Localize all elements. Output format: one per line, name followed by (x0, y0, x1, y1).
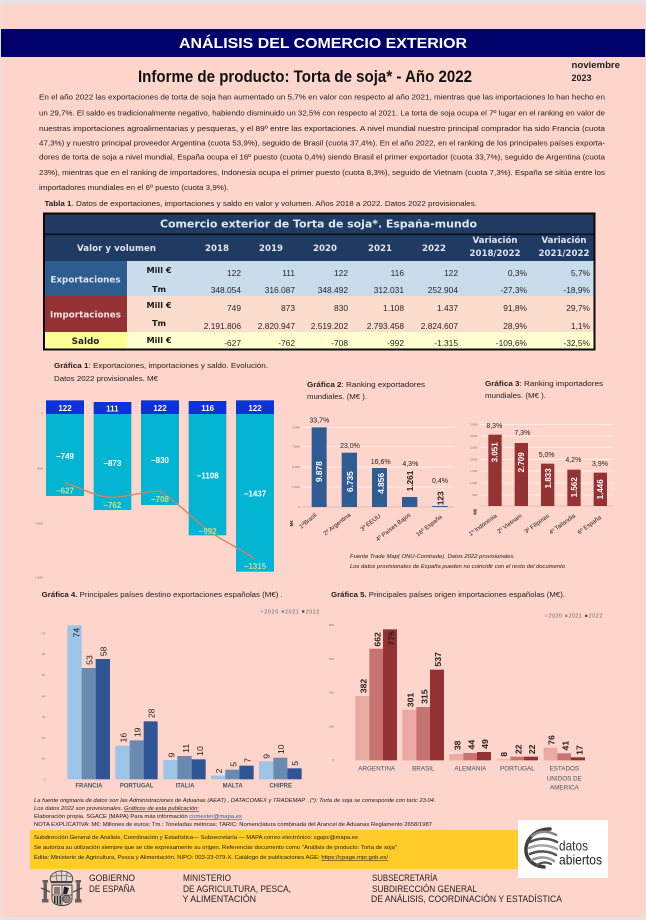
axis labels: -500 (37, 467, 43, 471)
axis labels: -1,500 (34, 576, 43, 580)
share labels: 4,3% (402, 461, 418, 468)
share labels: 23,0% (340, 443, 360, 450)
value labels (490, 442, 605, 499)
exportaciones values: 5,7% (571, 268, 591, 278)
category labels: UNIDOS DE (547, 775, 582, 782)
table header row: 2018/2022 (470, 249, 521, 259)
value labels: 17 (574, 745, 584, 755)
value labels: 22 (527, 744, 537, 754)
axis labels (470, 422, 478, 497)
table header row: 2021 (368, 244, 392, 254)
chart: grafica 1 evolucion (34, 400, 274, 580)
footnotes: Los datos 2022 son provisionales. Gráficos de esta publicación: (34, 806, 200, 812)
intro text: 23%), mientras que en el ranking de importadores, Indonesia ocupa el primer puesto (cuota 8,3%), seguido de Vietnam (cuota 7,3%). España se sitúa entre los (39, 168, 605, 177)
share labels (309, 417, 448, 485)
footer: ministerio (182, 873, 291, 905)
value labels: 1.261 (405, 470, 415, 491)
table header row: 2019 (259, 244, 283, 254)
share labels: 4,2% (565, 457, 581, 464)
table caption: Tabla 1 . Datos de exportaciones, importaciones y saldo en valor y volumen. Años 2018 a 2022. Datos 2022 provisionales. (44, 199, 477, 208)
importaciones values: 2.793.458 (367, 321, 404, 331)
share labels: 8,3% (486, 423, 502, 430)
import labels (56, 452, 267, 498)
value labels: 28 (146, 708, 156, 718)
import labels: −873 (103, 459, 122, 468)
value labels: 382 (358, 679, 368, 693)
table header row: 2018 (205, 244, 229, 254)
value labels (358, 631, 584, 757)
value labels: 123 (436, 491, 446, 505)
date: 2023 (572, 73, 592, 83)
value labels: 11 (181, 744, 191, 753)
exportaciones values: -27,3% (500, 285, 528, 295)
value labels: 1.562 (570, 477, 579, 497)
saldo values: -992 (387, 338, 404, 348)
axis labels: 2,500 (470, 445, 478, 449)
row labels (50, 276, 121, 347)
value labels: 53 (84, 655, 94, 665)
title banner: ANÁLISIS DEL COMERCIO EXTERIOR (179, 35, 467, 52)
value labels: 58 (99, 646, 109, 656)
bars 2022 (383, 629, 585, 760)
legend (545, 614, 602, 620)
bars 2022 (96, 659, 302, 779)
category labels: 6º España (576, 514, 603, 536)
value labels: 4.856 (376, 473, 386, 494)
axis labels: 600 (329, 657, 334, 661)
category labels: ARGENTINA (358, 766, 396, 773)
axis labels: 3,000 (470, 434, 478, 438)
exportaciones values: 122 (334, 268, 348, 278)
value labels: 9 (167, 752, 177, 757)
axis labels: 5,000 (292, 465, 300, 469)
chart: grafica 2 ranking exportadores (289, 417, 454, 543)
importaciones values: 1,1% (571, 321, 591, 331)
axis unit: M€ (289, 520, 294, 526)
heading: grafica 1: Gráfica 1 : Exportaciones, importaciones y saldo. Evolución. (54, 361, 268, 370)
saldo labels: −1315 (244, 562, 267, 571)
share labels: 3,9% (592, 461, 608, 468)
importaciones values: 1.437 (437, 303, 458, 313)
unit labels: Tm (152, 284, 166, 294)
category labels (298, 511, 444, 543)
saldo labels: −992 (199, 527, 217, 536)
title banner (1, 29, 645, 57)
logo: datos abiertos (518, 820, 608, 878)
saldo values: -708 (331, 338, 348, 348)
date: noviembre (572, 60, 620, 70)
value labels: 1.833 (544, 468, 553, 488)
credits band (30, 830, 520, 869)
unit labels: Mill € (146, 335, 172, 345)
axis labels: 0 (41, 411, 43, 415)
icon: coat of arms (41, 870, 82, 906)
bars 2020 (67, 625, 273, 779)
axis labels: 70 (42, 631, 46, 635)
export labels: 122 (58, 404, 72, 413)
footnotes: La fuente originaria de datos son las Administraciones de Aduanas (AEAT) , DATACOMEX y TRADEMAP . (*): Torta de soja se corresponde con taric 23.04. (34, 798, 435, 804)
axis labels: 20 (42, 736, 46, 740)
saldo values: -109,6% (496, 338, 528, 348)
source note: Los datos provisionales de España pueden no coincidir con el resto del documento (350, 564, 565, 570)
importaciones values: 749 (227, 303, 241, 313)
source note: Fuente Trade Map( ONU-Comtrade). Datos 2022 provisionales. (350, 554, 515, 560)
row labels: Saldo (72, 337, 99, 347)
axis labels: 500 (472, 493, 478, 497)
category labels: ITALIA (176, 783, 195, 789)
saldo line (65, 483, 255, 559)
saldo labels: −762 (103, 501, 122, 510)
category labels: 3º EEUU (359, 513, 382, 533)
share labels: 33,7% (309, 417, 329, 424)
legend: 2020 (264, 610, 278, 616)
importaciones values (204, 303, 591, 331)
axis labels: 800 (329, 623, 334, 627)
category labels (358, 766, 582, 792)
bars 2020 (355, 696, 557, 760)
export labels: 116 (201, 404, 215, 413)
axis labels: 2,500 (292, 485, 300, 489)
crown (50, 870, 73, 883)
pillars (41, 880, 82, 902)
importaciones values: 29,7% (566, 303, 591, 313)
value labels: 74 (72, 628, 82, 637)
share labels: 7,3% (514, 430, 530, 437)
footnotes (34, 798, 435, 828)
bars (488, 435, 607, 506)
heading: grafica 1: Datos 2022 provisionales. M€ (54, 374, 158, 383)
icon: striped globe (526, 829, 557, 867)
axis labels: 1,000 (470, 481, 478, 485)
footer: gobierno (89, 873, 135, 895)
date (572, 60, 620, 83)
category labels: ESTADOS (549, 766, 579, 773)
axis labels (42, 631, 46, 781)
value labels: 1.446 (596, 479, 605, 499)
legend: 2021 (569, 614, 582, 620)
value labels: 2.709 (517, 452, 526, 472)
import bars (46, 414, 274, 572)
value labels: 16 (118, 733, 128, 742)
legend: 2022 (589, 614, 602, 620)
intro text: dores de torta de soja a nivel mundial, España ocupa el 16º puesto (cuota 0,4%) siendo Brasil el primer exportador (cuota 33,7%), seguido de Argentina (cuota (39, 152, 606, 161)
value labels: 9.878 (314, 461, 324, 482)
axis labels: 50 (42, 673, 46, 677)
axis labels: 2,000 (470, 457, 478, 461)
value labels: 662 (372, 632, 382, 647)
axis labels: 1,500 (470, 469, 478, 473)
value labels: 8 (499, 752, 509, 757)
heading: grafica 1 (54, 361, 268, 383)
intro text (39, 92, 606, 192)
value labels: 301 (406, 693, 416, 707)
category labels (76, 783, 292, 789)
row labels: Exportaciones (50, 276, 121, 286)
importaciones values: 2.820.947 (258, 321, 295, 331)
value labels (314, 461, 446, 505)
footer: ministerio: MINISTERIO (183, 873, 231, 884)
bars 2021 (82, 668, 287, 779)
value labels: 6.735 (345, 471, 355, 492)
table title: Comercio exterior de Torta de soja*. España-mundo (160, 218, 477, 230)
exportaciones values (211, 268, 591, 295)
exportaciones values: 111 (282, 268, 295, 278)
saldo labels: −627 (56, 486, 75, 495)
credits band: Subdirección General de Análisis, Coordinación y Estadística— Subsecretaría — MAPA correo electrónico: sgapc@mapa.es (34, 835, 358, 841)
axis labels: -1,000 (34, 522, 43, 526)
report title: Informe de producto: Torta de soja* - Año 2022 (138, 67, 472, 86)
heading: grafica 2: Gráfica 2 : Ranking exportadores (307, 380, 425, 389)
heading: grafica 3: Gráfica 3 : Ranking importadores (485, 379, 603, 388)
value labels: 537 (433, 652, 443, 667)
value labels: 41 (560, 741, 570, 750)
share labels: 5,0% (539, 452, 555, 459)
unit labels (146, 265, 172, 345)
axis labels: 60 (42, 652, 46, 656)
footer: subsecretaria: SUBSECRETARÍA (372, 873, 438, 884)
bars 2021 (369, 649, 571, 760)
saldo labels (56, 486, 267, 571)
table header row: Valor y volumen (77, 244, 156, 254)
table header row: Variación (472, 235, 518, 246)
export labels: 111 (106, 404, 119, 413)
exportaciones values: 312.031 (374, 285, 404, 295)
bars (312, 427, 448, 507)
exportaciones values: -18,9% (563, 285, 591, 295)
heading: grafica 5: Gráfica 5. Principales países origen importaciones españolas (M€). (331, 590, 565, 599)
category labels: 2º Argentina (322, 511, 353, 537)
heading: grafica 2 (307, 380, 425, 401)
unit labels: Tm (152, 318, 166, 328)
share labels (486, 423, 608, 468)
value labels: 10 (195, 746, 205, 756)
value labels: 9 (262, 754, 272, 759)
heading: grafica 2: mundiales. (M€ ). (307, 392, 367, 401)
import labels: −1108 (197, 471, 219, 480)
importaciones values: 2.519.202 (311, 321, 348, 331)
footer: gobierno: GOBIERNO (89, 873, 135, 884)
category labels: 1ºBrasil (298, 512, 318, 530)
table header row (77, 235, 590, 259)
import labels: −830 (151, 456, 170, 465)
saldo values: -627 (224, 338, 241, 348)
source note (350, 554, 565, 570)
exportaciones values: 348.492 (318, 285, 348, 295)
value labels: 10 (276, 744, 286, 754)
export labels: 122 (248, 404, 262, 413)
axis labels: 400 (329, 691, 334, 695)
axis labels: 40 (42, 694, 46, 698)
shield (52, 885, 72, 906)
axis labels: 7,500 (292, 445, 300, 449)
axis labels: 0 (44, 777, 46, 781)
exportaciones values: 0,3% (508, 268, 528, 278)
legend: 2020 (549, 614, 562, 620)
axis labels: 0 (298, 505, 300, 509)
category labels: CHIPRE (269, 783, 292, 789)
heading: grafica 4: Gráfica 4. Principales países destino exportaciones españolas (M€) . (42, 590, 283, 599)
importaciones values: 873 (281, 303, 295, 313)
legend: 2022 (306, 610, 319, 616)
footer: gobierno: DE ESPAÑA (89, 884, 135, 895)
row labels: Importaciones (50, 310, 121, 320)
axis labels: 3,000 (292, 425, 300, 429)
axis labels: 200 (329, 724, 334, 728)
value labels: 775 (386, 631, 396, 646)
exportaciones values: 348.054 (211, 285, 241, 295)
category labels: FRANCIA (76, 783, 103, 789)
category labels: 3º Filipinas (523, 513, 551, 535)
export bars (46, 400, 274, 414)
category labels: AMERICA (550, 785, 580, 792)
saldo labels: −708 (151, 495, 170, 504)
importaciones values: 28,9% (503, 321, 528, 331)
value labels: 5 (290, 761, 300, 766)
intro text: un 29,7%. El saldo es tradicionalmente negativo, habiendo disminuido un 32,5% con respecto al 2021. La torta de soja ocupa el 7º lugar en el ranking en valor de (39, 108, 605, 117)
category labels: ALEMANIA (454, 766, 487, 773)
value labels: 49 (480, 739, 490, 749)
value labels: 3.051 (490, 442, 499, 462)
importaciones values: 1.108 (383, 303, 404, 313)
exportaciones values: 122 (444, 268, 458, 278)
table header row: 2022 (422, 244, 446, 254)
export labels (58, 404, 262, 413)
credits band: Edita: Ministerio de Agricultura, Pesca y Alimentación. NIPO: 003-23-079-X. Catálogo de publicaciones AGE: https://cpage.mpr.gob.es/ (34, 855, 389, 861)
axis labels: 3,500 (470, 422, 478, 426)
legend (261, 610, 319, 616)
value labels: 315 (419, 689, 429, 704)
share labels: 16,6% (371, 459, 391, 466)
axis labels (292, 425, 300, 509)
unit labels: Mill € (146, 300, 172, 310)
importaciones values: 2.824.607 (421, 321, 458, 331)
exportaciones values: 316.087 (265, 285, 295, 295)
saldo values: -762 (278, 338, 295, 348)
axis labels: 30 (42, 715, 46, 719)
category labels: 1º Indonesia (468, 512, 499, 538)
import labels: −1437 (244, 489, 267, 498)
credits band: Se autoriza su utilización siempre que se cite expresamente su origen. Referenciar documento como "Análisis de producto: Torta de soja" (34, 845, 397, 851)
category labels (468, 512, 603, 538)
logo text: abiertos (559, 852, 602, 868)
intro text: En el año 2022 las exportaciones de torta de soja han aumentado un 5,7% en valor con respecto al año 2021, mientras que las importaciones lo han hecho en (39, 92, 605, 101)
value labels: 7 (242, 758, 252, 763)
logo text: datos (559, 838, 588, 854)
category labels: 2º Vietnam (496, 513, 524, 535)
table header row: 2020 (313, 244, 337, 254)
value labels: 2 (214, 768, 224, 773)
importaciones values: 91,8% (503, 303, 528, 313)
footnotes: NOTA EXPLICATIVA: M€: Millones de euros; Tm.: Toneladas métricas; TARIC: Nomenclatura combinada del Arancel de Aduanas Reglamento 2658/1987 (34, 822, 432, 828)
category labels: 16º España (415, 513, 444, 538)
footnotes: Elaboración propia. SGACE (MAPA) Para más información comexter@mapa.es (34, 814, 242, 820)
share labels: 0,4% (432, 478, 448, 485)
category labels: 4º Países Bajos (375, 512, 412, 543)
footer: ministerio: Y ALIMENTACIÓN (182, 894, 256, 905)
saldo values (224, 338, 591, 348)
table: comercio exterior (44, 214, 594, 350)
saldo values: -32,5% (563, 338, 591, 348)
value labels: 38 (453, 740, 463, 750)
axis labels: 0 (332, 758, 334, 762)
importaciones values: 2.191.806 (204, 321, 241, 331)
footer: subsecretaria: DE ANÁLISIS, COORDINACIÓN Y ESTADÍSTICA (371, 894, 563, 905)
chart: grafica 4 destinos (42, 610, 319, 789)
logo text (559, 838, 602, 868)
exportaciones values: 252.904 (428, 285, 458, 295)
footer: ministerio: DE AGRICULTURA, PESCA, (183, 884, 291, 895)
axis unit: M€ (472, 508, 477, 515)
value labels: 5 (228, 762, 238, 767)
exportaciones values: 122 (227, 268, 241, 278)
importaciones values: 830 (334, 303, 348, 313)
axis labels: 10 (42, 757, 46, 761)
category labels: BRASIL (412, 766, 435, 773)
axis labels (329, 623, 334, 762)
export labels: 122 (153, 404, 167, 413)
heading: grafica 3 (485, 379, 603, 400)
intro text: importadores mundiales en el 6º puesto (cuota 3,9%). (39, 183, 229, 192)
table header row: Variación (541, 235, 587, 246)
axis labels (34, 411, 43, 580)
exportaciones values: 116 (391, 268, 404, 278)
chart: grafica 3 ranking importadores (468, 422, 613, 538)
value labels: 44 (466, 740, 476, 749)
import labels: −749 (56, 452, 75, 461)
category labels: PORTUGAL (500, 766, 535, 773)
legend: 2021 (285, 610, 299, 616)
heading: grafica 3: mundiales. (M€ ). (485, 391, 546, 400)
table header row: 2021/2022 (539, 249, 590, 259)
value labels: 76 (546, 735, 556, 745)
category labels: MALTA (223, 783, 243, 789)
footer: subsecretaria: SUBDIRECCIÓN GENERAL (372, 884, 478, 895)
intro text: nuestras importaciones agroalimentarias y pesqueras, y el 89º entre las exportaciones. A nivel mundial nuestro principal comprador ha sido Francia (cuota (39, 124, 606, 133)
intro text: 47,3%) y nuestro principal proveedor Argentina (cuota 53,9%), seguido de Brasil (cuota 37,4%). En el año 2022, en el ranking de los principales países exporta- (39, 138, 606, 147)
value labels: 22 (513, 744, 523, 754)
value labels: 19 (132, 727, 142, 737)
footer: subsecretaria (371, 873, 563, 905)
chart: grafica 5 origenes (329, 614, 602, 792)
value labels (72, 628, 300, 773)
category labels: PORTUGAL (120, 783, 154, 789)
unit labels: Mill € (146, 265, 172, 275)
saldo values: -1.315 (434, 338, 458, 348)
category labels: 4º Tailandia (548, 512, 577, 536)
